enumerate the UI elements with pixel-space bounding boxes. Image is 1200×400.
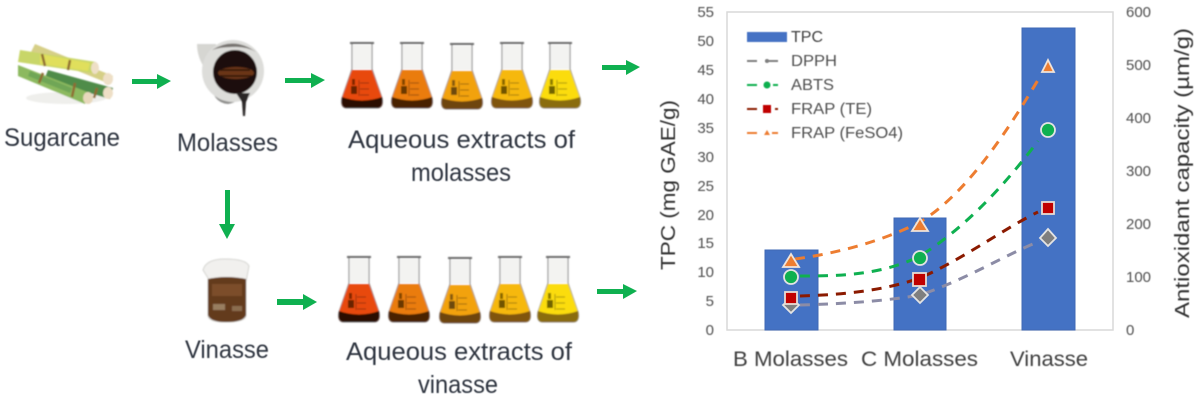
legend [747, 29, 903, 142]
flask 3 [442, 44, 482, 109]
right axis labels: 200 [1126, 216, 1151, 233]
flask 5 [538, 257, 578, 322]
legend: ABTS [791, 77, 834, 94]
label: aqueous extracts of molasses: Aqueous extracts of [348, 126, 575, 154]
markers: FRAP TE [785, 202, 1054, 304]
left axis labels: 45 [697, 62, 714, 79]
left axis labels [697, 4, 714, 339]
icon: molasses extract flasks [342, 43, 580, 109]
right axis labels: 300 [1126, 163, 1151, 180]
right axis title: Antioxidant capacity (µm/g) [1172, 28, 1194, 318]
icon: vinasse extract flasks [339, 257, 578, 323]
series: FRAP FeSO4 line [795, 80, 1038, 259]
arrow: molasses to extracts [285, 73, 325, 88]
legend: TPC [791, 29, 823, 46]
category labels [733, 348, 1088, 371]
label: aqueous extracts of vinasse [346, 338, 572, 399]
left axis title: TPC (mg GAE/g) [658, 100, 680, 270]
flask 1 [339, 257, 379, 322]
left axis labels: 10 [697, 264, 714, 281]
process labels [4, 124, 575, 399]
label: molasses: Molasses [177, 129, 278, 157]
flask 4 [492, 43, 532, 108]
left axis labels: 15 [697, 235, 714, 252]
arrow: vinasse extracts to chart [597, 284, 637, 299]
right axis labels: 100 [1126, 269, 1151, 286]
series: ABTS line [800, 141, 1038, 276]
left axis labels: 30 [697, 149, 714, 166]
label: aqueous extracts of vinasse: Aqueous extracts of [346, 338, 572, 366]
arrow: molasses to vinasse [219, 190, 235, 239]
flask 3 [440, 258, 480, 323]
icon: molasses cup [197, 40, 264, 116]
legend: DPPH [791, 53, 837, 70]
series: FRAP TE line [800, 212, 1038, 296]
flask 5 [540, 43, 580, 108]
left axis labels: 35 [697, 120, 714, 137]
category labels: B Molasses [733, 348, 848, 371]
left axis labels: 55 [697, 4, 714, 21]
flask 2 [392, 43, 432, 108]
right axis labels: 0 [1126, 322, 1134, 339]
markers: ABTS [784, 123, 1055, 284]
right axis labels: 600 [1126, 4, 1151, 21]
label: vinasse: Vinasse [185, 336, 269, 364]
left axis labels: 50 [697, 33, 714, 50]
category labels: C Molasses [861, 348, 978, 371]
arrow: sugarcane to molasses [132, 74, 171, 89]
left axis labels: 40 [697, 91, 714, 108]
flask 4 [490, 257, 530, 322]
label: aqueous extracts of molasses: molasses [411, 159, 511, 187]
left axis labels: 0 [706, 322, 714, 339]
flask 2 [389, 257, 429, 322]
markers: DPPH [783, 229, 1056, 313]
legend: FRAP (TE) [791, 101, 872, 118]
left axis labels: 5 [706, 293, 714, 310]
right axis labels: 500 [1126, 57, 1151, 74]
flask 1 [342, 43, 382, 108]
markers: FRAP FeSO4 [783, 60, 1054, 267]
arrow: molasses extracts to chart [602, 60, 640, 75]
plot frame [727, 12, 1113, 330]
panel: chart [658, 4, 1194, 371]
label: sugarcane: Sugarcane [4, 124, 120, 152]
left axis labels: 20 [697, 207, 714, 224]
right axis labels [1126, 4, 1151, 339]
bars: TPC [765, 28, 1075, 330]
series: DPPH line [800, 241, 1040, 305]
label: aqueous extracts of vinasse: vinasse [418, 371, 498, 399]
left axis labels: 25 [697, 178, 714, 195]
right axis labels: 400 [1126, 110, 1151, 127]
legend: FRAP (FeSO4) [791, 125, 903, 142]
icon: sugarcane [18, 44, 113, 104]
category labels: Vinasse [1010, 348, 1088, 371]
icon: vinasse beaker [203, 259, 249, 322]
label: aqueous extracts of molasses [348, 126, 575, 187]
arrow: vinasse to extracts [277, 294, 317, 310]
